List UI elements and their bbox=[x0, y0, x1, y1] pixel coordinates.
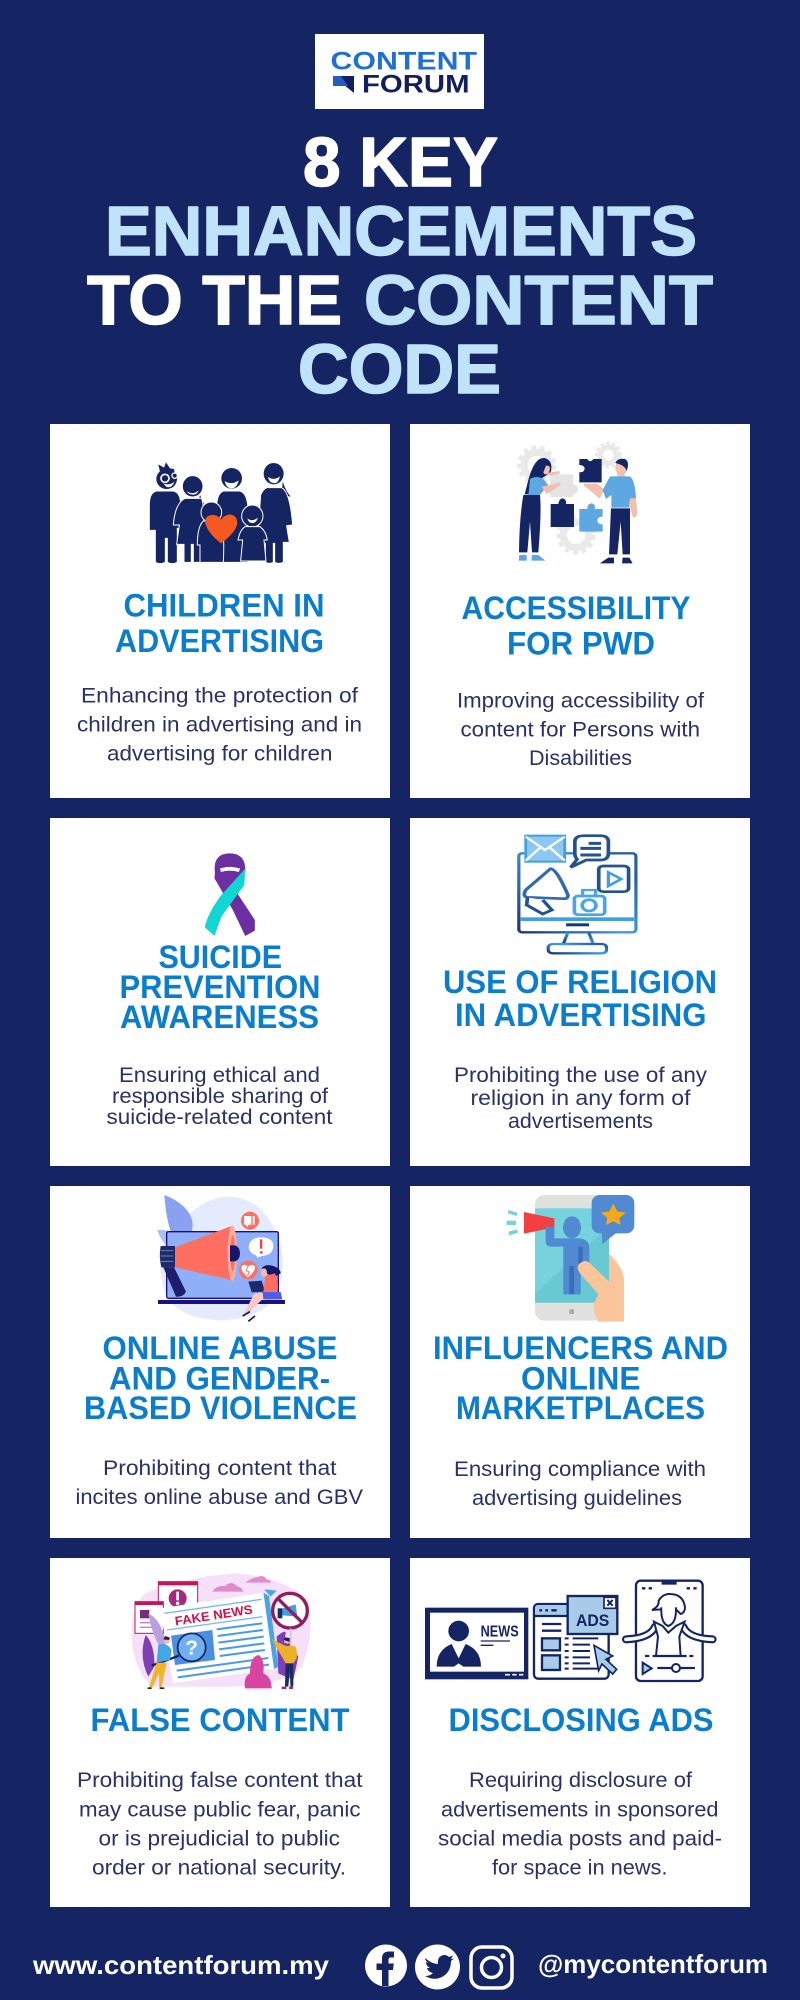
heading: FOR PWD bbox=[507, 626, 655, 662]
icon: fake news newspaper bbox=[132, 1573, 311, 1689]
icon: purple and teal ribbon bbox=[205, 853, 255, 936]
panel: use of religion in advertising bbox=[410, 818, 750, 1166]
body text: order or national security. bbox=[92, 1856, 346, 1880]
logo: Content Forum bbox=[315, 34, 484, 109]
icon: people with puzzle pieces bbox=[519, 443, 637, 563]
body text: Requiring disclosure of bbox=[469, 1768, 692, 1792]
heading: PREVENTION bbox=[120, 969, 320, 1005]
panel: disclosing ads bbox=[410, 1558, 750, 1907]
icon: news, ads and influencer screens bbox=[425, 1581, 713, 1681]
logo: Content Forum: FORUM bbox=[362, 70, 470, 98]
body text: Ensuring ethical and bbox=[119, 1063, 320, 1087]
panel: accessibility for PWD bbox=[410, 424, 750, 798]
icon: megaphone over laptop bbox=[157, 1195, 285, 1321]
heading: MARKETPLACES bbox=[456, 1390, 705, 1426]
heading: DISCLOSING ADS bbox=[448, 1702, 714, 1738]
title: ENHANCEMENTS bbox=[105, 192, 697, 270]
body text bbox=[457, 688, 704, 770]
heading: ONLINE bbox=[521, 1360, 640, 1396]
heading bbox=[120, 939, 320, 1035]
body text: Prohibiting false content that bbox=[77, 1768, 363, 1792]
heading: ADVERTISING bbox=[115, 623, 324, 659]
panel: online abuse and gender-based violence bbox=[50, 1186, 390, 1538]
body text bbox=[454, 1063, 707, 1133]
icon: twitter bbox=[415, 1944, 460, 1990]
body text: children in advertising and in bbox=[77, 712, 362, 736]
panel: false content bbox=[50, 1558, 390, 1907]
heading: ACCESSIBILITY bbox=[462, 590, 690, 626]
body text: Prohibiting the use of any bbox=[454, 1063, 707, 1087]
heading: CHILDREN IN bbox=[124, 588, 324, 624]
body text: or is prejudicial to public bbox=[98, 1826, 340, 1850]
icon: news, ads and influencer screens: ADS bbox=[576, 1611, 609, 1630]
body text: content for Persons with bbox=[460, 718, 700, 742]
body text: Prohibiting content that bbox=[103, 1456, 337, 1480]
body text bbox=[77, 1768, 363, 1880]
body text: Ensuring compliance with bbox=[454, 1457, 706, 1481]
body text: incites online abuse and GBV bbox=[76, 1485, 364, 1509]
body text: suicide-related content bbox=[106, 1105, 333, 1129]
icon: fake news newspaper: ? bbox=[185, 1637, 198, 1660]
body text: advertising for children bbox=[107, 742, 332, 766]
body text: for space in news. bbox=[492, 1856, 668, 1880]
icon: hand holding phone with influencer bbox=[507, 1195, 634, 1322]
icon: monitor with media icons bbox=[519, 836, 636, 953]
logo: Content Forum: CONTENT bbox=[330, 48, 477, 76]
heading: USE OF RELIGION bbox=[443, 964, 717, 1000]
body text: Enhancing the protection of bbox=[81, 684, 358, 708]
body text: Improving accessibility of bbox=[457, 688, 704, 712]
title: CONTENT bbox=[364, 261, 713, 339]
panel: suicide prevention awareness bbox=[50, 818, 390, 1166]
body text: may cause public fear, panic bbox=[79, 1798, 361, 1822]
heading: INFLUENCERS AND bbox=[433, 1330, 728, 1366]
footer social handle: @mycontentforum bbox=[538, 1949, 768, 1979]
body text bbox=[106, 1063, 333, 1129]
heading: ONLINE ABUSE bbox=[102, 1330, 338, 1366]
icon: instagram bbox=[471, 1947, 512, 1988]
body text: religion in any form of bbox=[470, 1086, 691, 1110]
body text: advertisements in sponsored bbox=[441, 1798, 718, 1822]
body text bbox=[438, 1768, 722, 1880]
body text bbox=[77, 684, 362, 766]
icon: fake news newspaper: FAKE NEWS bbox=[174, 1603, 253, 1629]
heading bbox=[115, 588, 324, 659]
heading: IN ADVERTISING bbox=[455, 997, 706, 1033]
body text: social media posts and paid- bbox=[438, 1826, 722, 1850]
body text bbox=[76, 1456, 364, 1509]
body text: advertisements bbox=[508, 1109, 653, 1133]
heading bbox=[433, 1330, 728, 1426]
title: TO THE bbox=[87, 261, 342, 339]
body text: responsible sharing of bbox=[112, 1084, 328, 1108]
icon: family with heart bbox=[149, 462, 293, 564]
heading: FALSE CONTENT bbox=[90, 1702, 350, 1738]
heading bbox=[462, 590, 690, 662]
footer website: www.contentforum.my bbox=[32, 1950, 330, 1980]
body text: advertising guidelines bbox=[472, 1486, 682, 1510]
title: CODE bbox=[298, 330, 501, 408]
panel: children in advertising bbox=[50, 424, 390, 798]
heading: BASED VIOLENCE bbox=[84, 1390, 357, 1426]
heading bbox=[443, 964, 717, 1033]
body text bbox=[454, 1457, 706, 1510]
heading: AWARENESS bbox=[120, 999, 319, 1035]
heading: AND GENDER- bbox=[109, 1360, 330, 1396]
icon: news, ads and influencer screens: NEWS bbox=[481, 1624, 519, 1641]
title bbox=[87, 123, 713, 408]
title: 8 KEY bbox=[303, 123, 498, 201]
body text: Disabilities bbox=[529, 746, 632, 770]
heading bbox=[84, 1330, 357, 1426]
heading: SUICIDE bbox=[158, 939, 282, 975]
panel: influencers and online marketplaces bbox=[410, 1186, 750, 1538]
icon: facebook bbox=[365, 1944, 407, 1986]
